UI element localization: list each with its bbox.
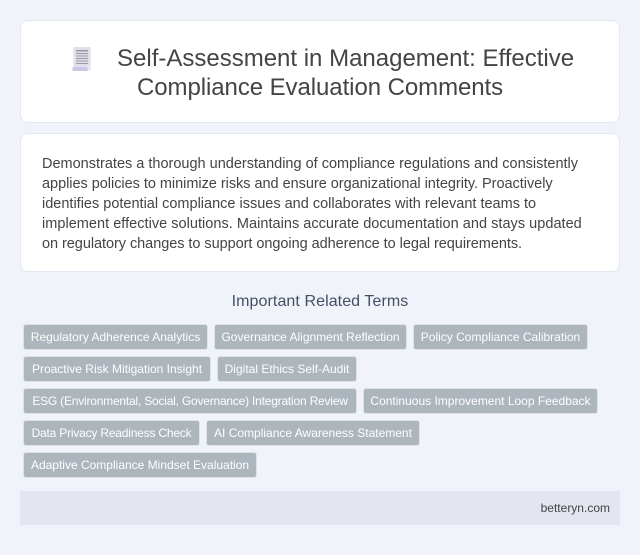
tag: [23, 388, 357, 414]
icon: document scroll: [72, 47, 91, 71]
panel: description: [20, 133, 620, 272]
description text: applies policies to minimize risks and ensure organizational integrity. Proactively: [42, 176, 553, 192]
description text: identifies potential compliance issues and collaborates with relevant teams to: [42, 196, 536, 212]
tag: Governance Alignment Reflection: [221, 330, 400, 344]
title: Compliance Evaluation Comments: [137, 74, 503, 101]
tag: Digital Ethics Self-Audit: [225, 362, 349, 376]
description text: implement effective solutions. Maintains accurate documentation and stays updated: [42, 216, 582, 232]
tag: [23, 356, 211, 382]
footer: site name: betteryn.com: [541, 501, 610, 515]
description text: Demonstrates a thorough understanding of compliance regulations and consistently: [42, 156, 578, 172]
tag: [214, 324, 407, 350]
tag: [23, 420, 200, 446]
tag: Regulatory Adherence Analytics: [31, 330, 200, 344]
tag: Proactive Risk Mitigation Insight: [32, 362, 202, 376]
panel: header: [20, 20, 620, 123]
tag: Adaptive Compliance Mindset Evaluation: [31, 458, 249, 472]
tag list: [23, 324, 598, 478]
tag: [23, 452, 257, 478]
footer bar: [20, 491, 620, 525]
tag: [23, 324, 208, 350]
tag: Data Privacy Readiness Check: [32, 426, 191, 440]
tag: ESG (Environmental, Social, Governance) Integration Review: [32, 394, 348, 408]
tag: Policy Compliance Calibration: [421, 330, 580, 344]
heading: related terms: Important Related Terms: [232, 293, 408, 310]
tag: [217, 356, 357, 382]
description text: [42, 156, 582, 252]
tag: [413, 324, 588, 350]
title: Self-Assessment in Management: Effective: [117, 45, 574, 72]
tag: AI Compliance Awareness Statement: [214, 426, 412, 440]
description text: on regulatory changes to support ongoing adherence to legal requirements.: [42, 236, 522, 252]
title: [117, 45, 574, 101]
tag: [206, 420, 420, 446]
tag: Continuous Improvement Loop Feedback: [370, 394, 591, 408]
tag: [363, 388, 598, 414]
